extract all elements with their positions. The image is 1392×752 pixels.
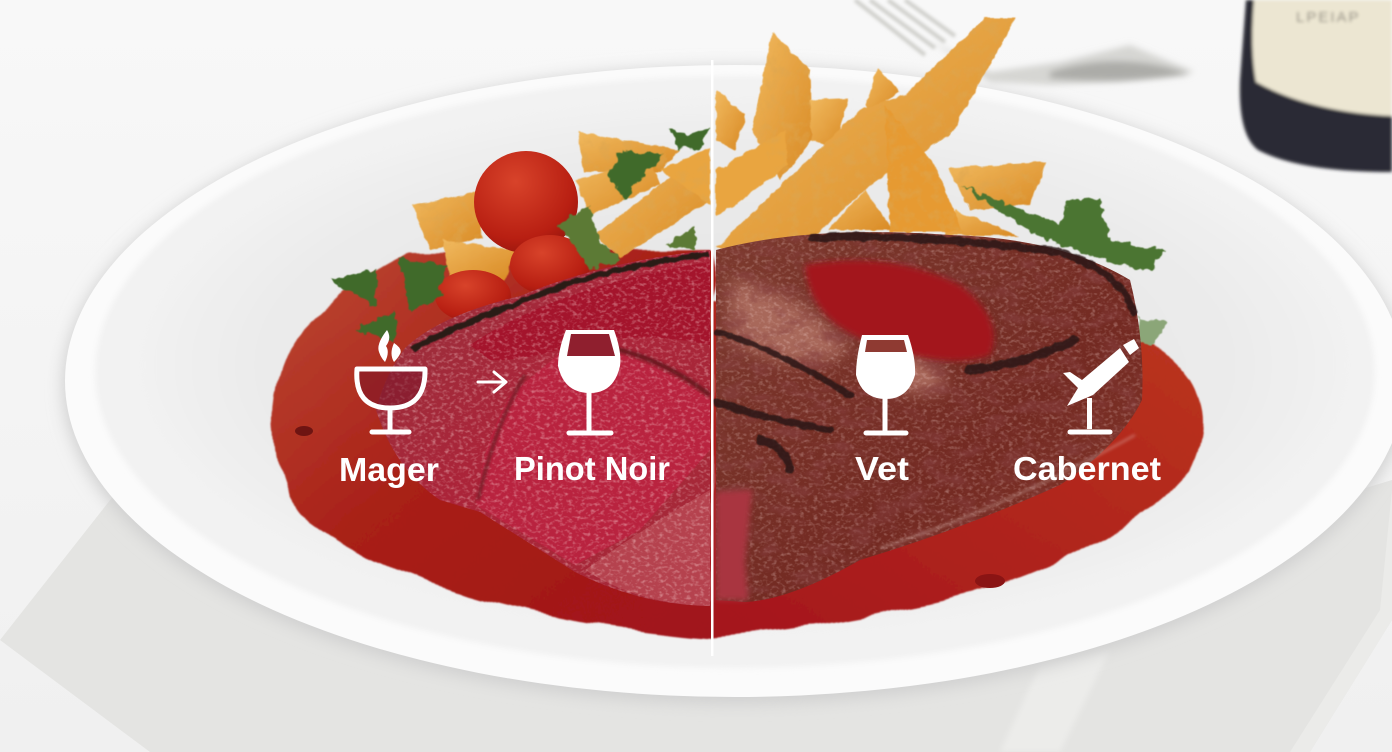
herbs, right side	[962, 186, 1168, 346]
icon: steam	[378, 330, 401, 362]
crisp mottling on fries	[412, 18, 1047, 258]
wine bottle with label	[1240, 0, 1392, 172]
sauce drop	[975, 574, 1005, 588]
steak, left rare half	[376, 250, 710, 606]
icon: Cabernet tilted glass	[1063, 339, 1139, 432]
cherry tomatoes	[435, 151, 590, 322]
steak, right well-done half	[716, 232, 1142, 602]
sauce drop	[295, 426, 313, 436]
sauce, left half	[273, 250, 712, 637]
fries, right side	[716, 18, 1047, 250]
herbs, left side	[332, 128, 708, 342]
icon: warm bowl glass with steam	[357, 330, 425, 432]
label: Pinot Noir: Pinot Noir	[514, 450, 670, 487]
fries, left side	[412, 132, 710, 280]
fork, blurred in background	[855, 0, 1195, 85]
sauce, right half	[712, 300, 1202, 637]
icon: Pinot Noir glass	[558, 330, 620, 433]
crust on left steak	[412, 254, 708, 350]
grill marks and crust	[716, 237, 1134, 470]
napkin under the plate	[0, 480, 1392, 752]
centre divider line	[711, 60, 714, 656]
label: Vet: Vet	[855, 450, 909, 487]
label: Cabernet: Cabernet	[1013, 450, 1161, 487]
glints along steak base	[880, 435, 1135, 548]
icon: arrow	[478, 372, 506, 392]
label: Mager: Mager	[339, 451, 439, 488]
bottle label text: LPEIAP	[1296, 9, 1361, 26]
icon: Vet glass	[856, 335, 915, 433]
